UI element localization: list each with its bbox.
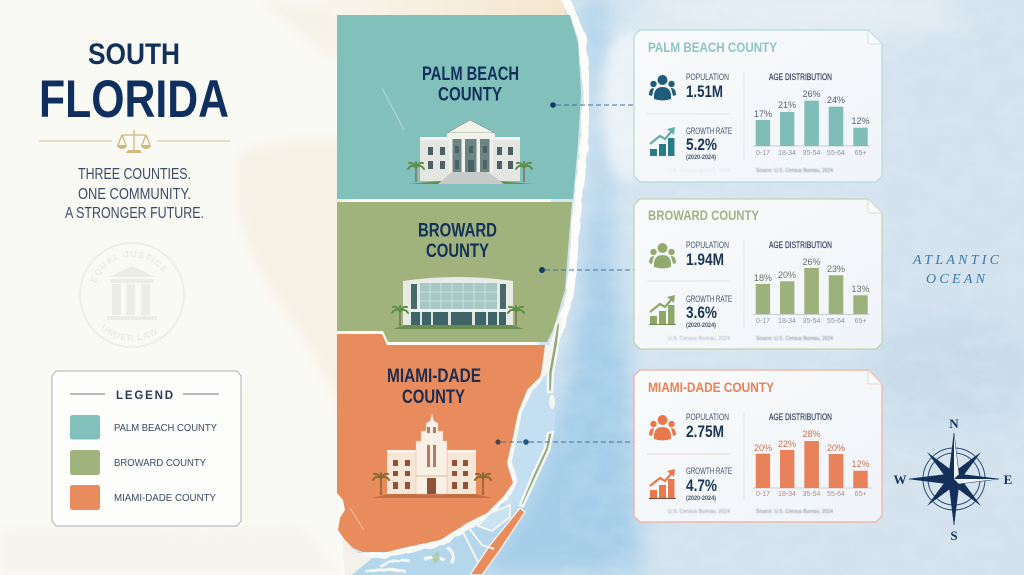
- panel: legend: [52, 371, 241, 526]
- connector: Broward: [539, 267, 634, 273]
- population stat: POPULATION: [686, 412, 729, 423]
- tagline: A STRONGER FUTURE.: [65, 205, 204, 222]
- lagoon and Florida Bay: [342, 375, 556, 575]
- growth rate stat: GROWTH RATE: [686, 126, 732, 137]
- source notes: U.S. Census Bureau, 2024: [668, 509, 730, 515]
- growth rate stat: (2020-2024): [686, 495, 716, 502]
- source notes: [668, 336, 833, 342]
- bar chart: age distribution: 24%: [827, 95, 845, 105]
- seal: equal justice under law: [79, 242, 185, 348]
- growth rate stat: 3.6%: [686, 304, 717, 322]
- icon: compass rose: W: [894, 472, 906, 487]
- growth rate stat: 5.2%: [686, 136, 717, 154]
- label: Atlantic Ocean: ATLANTIC: [912, 253, 1000, 268]
- source notes: Source: U.S. Census Bureau, 2024: [756, 509, 833, 515]
- bar chart: age distribution: 20%: [827, 443, 845, 453]
- background: Atlantic Ocean: [345, 0, 1024, 575]
- bar chart: age distribution: [753, 72, 870, 157]
- source notes: Source: U.S. Census Bureau, 2024: [756, 336, 833, 342]
- map streaks: [350, 88, 404, 530]
- population stat: 1.51M: [686, 83, 723, 101]
- source notes: [668, 509, 833, 515]
- bar chart: age distribution: 23%: [827, 264, 845, 274]
- bar chart: age distribution: 26%: [802, 257, 821, 267]
- legend item: Palm Beach: PALM BEACH COUNTY: [114, 422, 217, 434]
- growth rate stat: (2020-2024): [686, 154, 716, 161]
- coastline foam: [360, 0, 587, 555]
- map: Palm Beach County region: [337, 15, 581, 199]
- icon: Broward courthouse: [392, 277, 524, 329]
- icon: people: [649, 243, 676, 268]
- panel title: PALM BEACH COUNTY: [648, 39, 778, 55]
- icon: compass rose: N: [949, 416, 959, 431]
- source notes: U.S. Census Bureau, 2024: [668, 336, 730, 342]
- bar chart: age distribution: 65+: [855, 318, 866, 325]
- map: Broward County region: [337, 202, 572, 342]
- icon: Miami-Dade courthouse: [372, 413, 492, 498]
- panel title: BROWARD COUNTY: [648, 207, 760, 223]
- bar chart: age distribution: AGE DISTRIBUTION: [769, 412, 832, 423]
- legend item: Palm Beach: [70, 415, 217, 440]
- label: Atlantic Ocean: OCEAN: [926, 272, 986, 287]
- bar chart: age distribution: 18-34: [778, 150, 796, 157]
- icon: Palm Beach courthouse: [408, 120, 532, 184]
- growth rate stat: GROWTH RATE: [686, 466, 732, 477]
- growth rate stat: [686, 466, 732, 502]
- growth rate stat: GROWTH RATE: [686, 294, 732, 305]
- label: Broward County: BROWARD: [418, 220, 497, 242]
- bar chart: age distribution: 65+: [855, 150, 866, 157]
- bar chart: age distribution: 35-54: [803, 150, 821, 157]
- label: Broward County: [418, 220, 497, 262]
- icon: growth chart: [649, 469, 676, 498]
- bar chart: age distribution: 55-64: [827, 150, 845, 157]
- growth rate stat: [686, 126, 732, 161]
- map: Miami-Dade County region: [337, 334, 546, 552]
- bar chart: age distribution: 17%: [754, 109, 772, 119]
- label: Palm Beach County: PALM BEACH: [422, 64, 519, 85]
- growth rate stat: (2020-2024): [686, 322, 716, 329]
- bar chart: age distribution: 26%: [802, 89, 821, 99]
- icon: growth chart: [650, 127, 675, 156]
- label: Atlantic Ocean: [912, 253, 1000, 287]
- icon: scales divider: [39, 130, 230, 153]
- legend item: Broward: BROWARD COUNTY: [114, 457, 206, 469]
- bar chart: age distribution: 20%: [778, 270, 796, 280]
- population stat: POPULATION: [686, 240, 729, 251]
- bar chart: age distribution: 0-17: [756, 491, 770, 498]
- label: Broward County: COUNTY: [426, 241, 489, 262]
- bar chart: age distribution: [753, 240, 870, 325]
- tagline: ONE COMMUNITY.: [78, 186, 191, 203]
- bar chart: age distribution: 65+: [855, 491, 866, 498]
- bar chart: age distribution: 28%: [802, 429, 821, 439]
- bar chart: age distribution: AGE DISTRIBUTION: [769, 240, 832, 251]
- panel: Palm Beach County stats: [634, 30, 882, 182]
- bar chart: age distribution: 18-34: [778, 491, 796, 498]
- tagline: THREE COUNTIES.: [78, 166, 191, 183]
- icon: people: [649, 75, 676, 100]
- label: Miami-Dade County: [387, 366, 481, 408]
- population stat: 2.75M: [686, 423, 724, 441]
- label: Palm Beach County: [422, 64, 519, 106]
- bar chart: age distribution: 13%: [851, 284, 870, 294]
- population stat: [686, 72, 729, 101]
- bar chart: age distribution: 0-17: [756, 318, 770, 325]
- population stat: POPULATION: [686, 72, 729, 83]
- legend item: Miami-Dade: [70, 485, 216, 510]
- icon: growth chart: [649, 295, 676, 324]
- connector: Palm Beach: [550, 102, 634, 108]
- bar chart: age distribution: 35-54: [803, 491, 821, 498]
- legend item: Miami-Dade: MIAMI-DADE COUNTY: [114, 492, 216, 504]
- seal: equal justice under law: EQUAL JUSTICE: [90, 251, 168, 282]
- bar chart: age distribution: 12%: [851, 459, 870, 469]
- bar chart: age distribution: 12%: [851, 116, 870, 126]
- bar chart: age distribution: 22%: [778, 439, 796, 449]
- bar chart: age distribution: 18%: [754, 273, 772, 283]
- icon: people: [649, 415, 676, 440]
- growth rate stat: 4.7%: [686, 477, 717, 495]
- legend item: Broward: [70, 450, 206, 475]
- label: Palm Beach County: COUNTY: [438, 84, 502, 106]
- bar chart: age distribution: 55-64: [827, 318, 845, 325]
- barrier islands and keys: [432, 318, 561, 575]
- panel title: MIAMI-DADE COUNTY: [648, 379, 775, 395]
- title: FLORIDA: [39, 70, 229, 129]
- bar chart: age distribution: 20%: [754, 443, 772, 453]
- label: Miami-Dade County: MIAMI-DADE: [387, 366, 481, 387]
- source notes: U.S. Census Bureau, 2024: [668, 168, 730, 174]
- icon: compass rose: E: [1004, 472, 1012, 487]
- label: Miami-Dade County: COUNTY: [402, 387, 465, 408]
- population stat: [686, 240, 729, 269]
- bar chart: age distribution: 35-54: [803, 318, 821, 325]
- bar chart: age distribution: 21%: [778, 100, 796, 110]
- population stat: [686, 412, 729, 441]
- panel: Miami-Dade County stats: [634, 370, 882, 522]
- tagline: [65, 166, 204, 222]
- bar chart: age distribution: [753, 412, 872, 498]
- connector: Miami-Dade: [495, 439, 634, 445]
- population stat: 1.94M: [686, 251, 724, 269]
- seal: equal justice under law: UNDER LAW: [102, 324, 157, 341]
- bar chart: age distribution: AGE DISTRIBUTION: [769, 72, 832, 83]
- title: [39, 38, 229, 129]
- growth rate stat: [686, 294, 732, 329]
- bar chart: age distribution: 18-34: [778, 318, 796, 325]
- icon: compass rose: [894, 416, 1012, 543]
- source notes: Source: U.S. Census Bureau, 2024: [756, 168, 833, 174]
- bar chart: age distribution: 0-17: [756, 150, 770, 157]
- bar chart: age distribution: 55-64: [827, 491, 845, 498]
- title: SOUTH: [88, 38, 180, 71]
- source notes: [668, 168, 833, 174]
- legend heading: LEGEND: [116, 390, 173, 402]
- icon: compass rose: S: [950, 528, 958, 543]
- panel: Broward County stats: [634, 199, 882, 349]
